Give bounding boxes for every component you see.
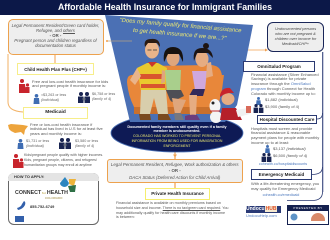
icon: US map five year xyxy=(8,124,28,135)
link: hospital discounts: cohealth.co/hospitaldiscounts xyxy=(259,162,307,166)
icon: web xyxy=(15,216,24,222)
ellipse text: INFORMATION FROM BEING USED FOR IMMIGRATION xyxy=(132,139,222,143)
text: phone number: 855-752-6749 xyxy=(30,204,54,208)
text: Medicaid description: Free or low-cost health insurance if xyxy=(30,122,92,126)
text: OmniSalud individual income: $1,882 (individual) xyxy=(265,96,298,102)
text: CHP+ individual income: ≈$3,263 or less xyxy=(41,93,66,97)
text: OmniSalud description: program through Connect for Health xyxy=(251,86,315,91)
text: higher income note xyxy=(24,152,103,167)
heading: Private Health Insurance: Private Health Insurance xyxy=(151,191,204,196)
mom xyxy=(161,47,186,120)
text: CHP+ family income xyxy=(92,92,116,101)
text: hospital description xyxy=(251,126,320,145)
text: private insurance description: household size and income. There is no tax/green card required. You xyxy=(116,206,228,210)
text: CHP+ description: Free and low-cost health insurance for kids xyxy=(32,78,108,84)
daughter xyxy=(185,43,213,120)
panel: undocumented persons: Medicaid/CHP+ xyxy=(282,41,309,46)
text: CHP+ individual income xyxy=(41,93,66,102)
text: private insurance description: may additionally qualify for health care discounts if monthly income xyxy=(116,211,225,215)
panel: eligibility for CHP+ and Medicaid: Refugee, and others xyxy=(36,28,75,33)
text: CHP+ description xyxy=(32,78,108,88)
heading: Hospital Discounted Care: Hospital Discounted Care xyxy=(260,117,314,122)
logo: Connect for Health Colorado xyxy=(15,190,68,200)
text: presented by: PRESENTED BY xyxy=(293,206,323,210)
icon: kids and pregnant people xyxy=(13,154,24,168)
panel: eligibility for private insurance xyxy=(107,159,242,183)
text: higher income note: humanitarian groups may enroll at anytime xyxy=(24,162,92,166)
logo: Connect for Health Colorado: COLORADO xyxy=(45,196,62,200)
text: Medicaid description xyxy=(30,122,103,136)
text: Medicaid family income xyxy=(75,139,98,148)
text: OmniSalud description xyxy=(251,72,319,96)
text: hospital description: Hospitals must screen and provide xyxy=(251,126,312,130)
text: hospital individual income: $3,137 (individual) xyxy=(273,146,306,151)
text: OmniSalud family income: $3,900 (family of 4) xyxy=(265,104,299,109)
panel: eligibility for CHP+ and Medicaid: - OR - xyxy=(50,33,61,38)
heading: Emergency Medicaid xyxy=(251,168,312,180)
panel: undocumented persons: who are not pregnant & xyxy=(275,31,316,36)
text: private insurance description: Financial assistance is available on monthly premiums based on xyxy=(116,201,221,205)
text: hospital description: income up to at least: xyxy=(251,140,289,145)
text: Medicaid individual income xyxy=(26,139,50,148)
ellipse text: ENFORCEMENT xyxy=(163,144,191,148)
text: hospital description: payment plans for people with monthly xyxy=(251,135,319,140)
text: OmniSalud description: Colorado with monthly income up to: xyxy=(251,91,316,96)
text: emergency description xyxy=(251,181,319,191)
icon: logo leaves xyxy=(60,177,76,192)
title bar xyxy=(0,0,330,15)
panel: undocumented persons xyxy=(267,22,324,52)
heading: Child Health Plan Plus xyxy=(17,63,94,75)
ellipse text: member is undocumented. xyxy=(154,129,200,133)
text: OmniSalud description: insurance through the OmniSalud xyxy=(251,81,311,86)
panel: eligibility for private insurance: DACA Status (Deferred Action for Child Arrival) xyxy=(129,175,220,180)
panel: eligibility for CHP+ and Medicaid: Pregnant person and children regardless of xyxy=(14,38,97,43)
logo: presenter seals xyxy=(290,213,325,221)
text: CHP+ individual income: (Individual) xyxy=(41,98,59,102)
panel: eligibility for CHP+ and Medicaid: documentation status xyxy=(35,43,76,48)
text: Medicaid family income: (family of 4) xyxy=(75,144,94,148)
text: private insurance description xyxy=(116,201,228,219)
panel: eligibility for private insurance: - OR - xyxy=(169,168,181,173)
text: presented by xyxy=(287,205,329,211)
icon: pregnant person and child xyxy=(19,79,30,93)
poster quote xyxy=(119,18,242,42)
text: Medicaid family income: $3,580 or less xyxy=(75,139,98,143)
text: Medicaid individual income: (Individual) xyxy=(26,144,44,148)
heading: OmniSalud xyxy=(243,60,315,72)
logo: Connect for Health Colorado: CONNECT for HEALTH xyxy=(15,190,68,196)
text: hospital family income: $6,500 (family of 4) xyxy=(273,153,307,158)
icon: phone xyxy=(17,201,26,210)
panel: how to apply xyxy=(8,173,99,225)
text: emergency description: may qualify for Emergency Medicaid xyxy=(251,186,315,191)
heading: how to apply xyxy=(8,173,99,181)
panel: eligibility for private insurance: Legal Permanent Resident, Refugee, Work authorization & others xyxy=(111,162,239,167)
icon: family xyxy=(254,104,264,113)
icon: family xyxy=(59,138,71,149)
dad xyxy=(130,39,171,120)
icon: family xyxy=(78,92,90,103)
text: higher income note: Kids, pregnant people, citizens, and refugees/ xyxy=(24,158,97,162)
link: emergency medicaid: cohealth.co/emedicaid xyxy=(263,193,299,197)
heading: Medicaid xyxy=(23,107,88,118)
icon: individual xyxy=(265,145,270,153)
boy and dog xyxy=(210,88,251,123)
title bar: Affordable Health Insurance for Immigrant Families xyxy=(58,2,272,12)
text: Medicaid individual income: $1,731 or less xyxy=(26,139,49,143)
icon: individual xyxy=(18,139,24,149)
logo: UndocuHub: UndocuHUB xyxy=(246,206,276,212)
ellipse text: COLORADO HAS WORKED TO PREVENT PERSONAL xyxy=(133,134,221,138)
panel: eligibility for CHP+ and Medicaid: Legal Permanent Resident/Green card holder, xyxy=(12,23,99,28)
panel: undocumented persons: Undocumented persons xyxy=(275,26,316,30)
text: hospital description: financial assistance & reasonable xyxy=(251,130,310,135)
text: OmniSalud description: Financial assistance (Silver Enhanced xyxy=(251,72,319,76)
text: higher income note: Kids/pregnant people qualify with higher incomes. xyxy=(24,152,103,156)
heading: Medicaid: Medicaid xyxy=(45,110,66,115)
text: OmniSalud description: Savings) is available for private xyxy=(251,76,306,81)
heading: Child Health Plan Plus: Child Health Plan Plus (CHP+) xyxy=(24,66,87,72)
poster quote: "Does my family qualify for financial assistance xyxy=(119,18,242,34)
heading: Private Health Insurance xyxy=(145,188,210,200)
heading: OmniSalud: OmniSalud Program xyxy=(257,64,301,68)
text: private insurance description: is between: xyxy=(116,215,135,219)
text: CHP+ family income: $6,758 or less xyxy=(92,92,115,96)
ellipse text: Documented family members still qualify even if a family xyxy=(127,124,227,128)
panel: eligibility for CHP+ and Medicaid xyxy=(8,19,104,55)
panel: undocumented persons: children over income for xyxy=(275,36,316,41)
heading: how to apply: HOW TO APPLY: xyxy=(14,174,44,179)
heading: Hospital Discounted Care xyxy=(257,114,317,124)
poster quote: to get health insurance if we are...?" xyxy=(133,28,227,42)
text: CHP+ description: and pregnant people if monthly income is: xyxy=(32,83,106,88)
heading: Emergency Medicaid: Emergency Medicaid xyxy=(259,172,304,176)
panel: family illustration poster xyxy=(105,15,253,152)
text: emergency description: With a life-threatening emergency, you xyxy=(251,181,319,186)
ellipse text xyxy=(127,124,227,148)
text: CHP+ family income: (family of 4) xyxy=(92,97,111,101)
couch xyxy=(127,65,224,114)
text: Medicaid description: individual has lived in U.S for at least five xyxy=(30,126,103,131)
panel: presented by xyxy=(287,205,329,225)
text: Medicaid description: years and monthly income is: xyxy=(30,131,82,136)
link: undocuhelp: UndocuHelp.com xyxy=(246,213,277,218)
icon: individual xyxy=(34,94,40,104)
icon: family xyxy=(262,153,272,162)
icon: individual xyxy=(256,97,261,105)
